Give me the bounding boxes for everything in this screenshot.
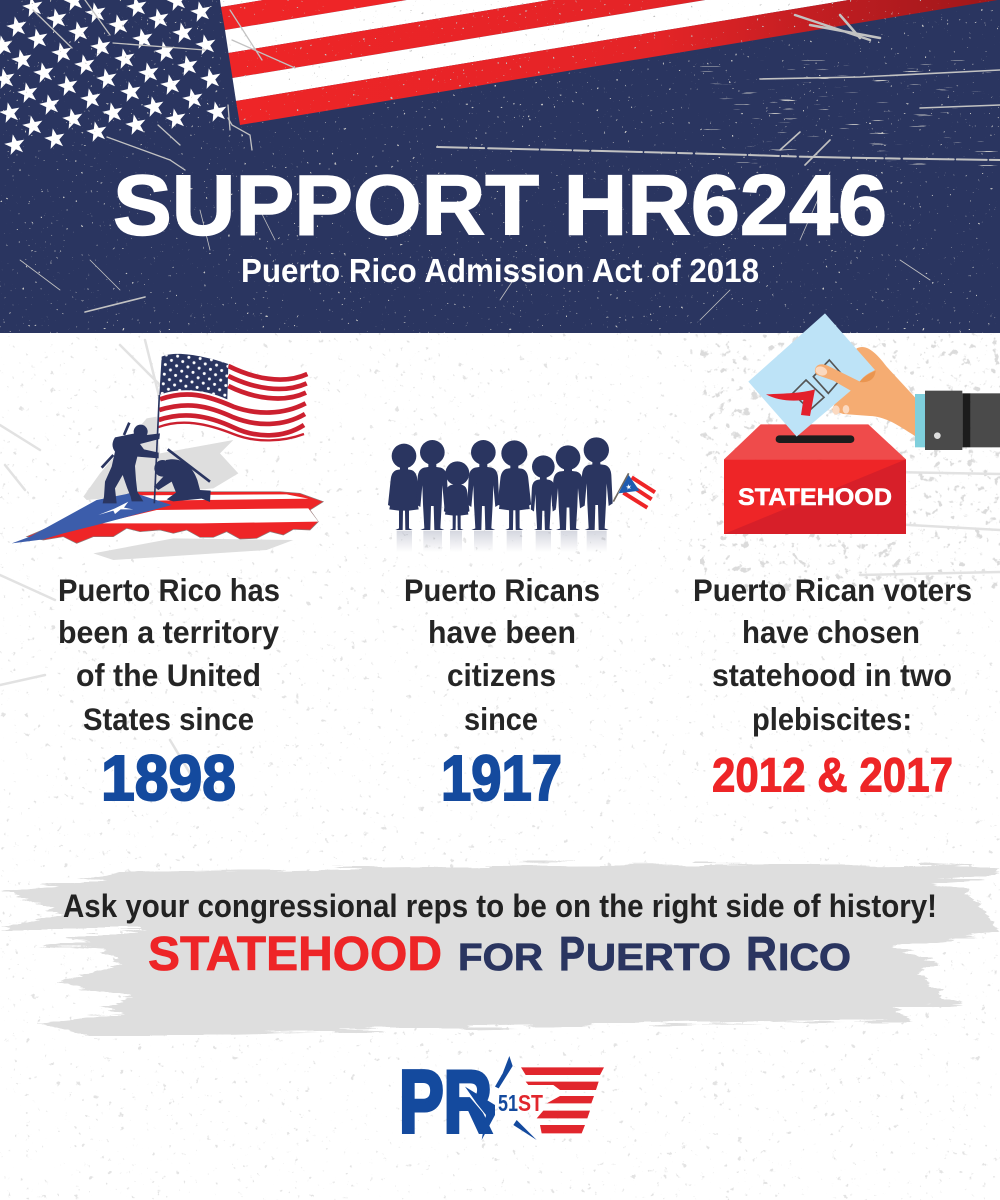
column 2 text: citizens since 1917: have been: [428, 614, 576, 650]
people: [388, 437, 613, 530]
ballot box: [724, 424, 906, 534]
column 3 text: plebiscites: plebiscites:: [752, 701, 912, 737]
illustration: hand casting ballot into statehood box: [724, 313, 1000, 534]
header banner: [0, 0, 1000, 333]
column 3 text: plebiscites: statehood in two: [712, 657, 952, 693]
title: SUPPORT HR6246: [113, 158, 887, 254]
column 1 text: territory since 1898: been a territory: [58, 614, 279, 650]
ballot paper: [748, 313, 875, 437]
hand palm: [832, 347, 915, 436]
illustration: soldiers raising flag on Puerto Rico map: [12, 354, 323, 560]
stars: [0, 0, 229, 156]
PR51st logo: [399, 1052, 604, 1151]
rifle behind kneeling soldier: [168, 449, 210, 482]
call to action headline: [148, 928, 851, 981]
US flag: [157, 354, 307, 440]
standing soldier: [102, 423, 160, 503]
year 1898: 1898: [101, 742, 236, 814]
column 1 text: territory since 1898: States since: [83, 701, 254, 737]
column 3 text: plebiscites: [693, 572, 972, 737]
column 2 text: citizens since 1917: citizens: [447, 657, 556, 693]
map flag: [12, 492, 323, 543]
flag stripes: [220, 0, 1000, 125]
call to action headline: STATEHOOD: [148, 928, 442, 981]
call to action headline: UERTO: [586, 937, 731, 979]
column 2 text: citizens since 1917: [404, 572, 600, 737]
illustration: family holding hands with Puerto Rican flag: [388, 437, 656, 552]
column 1 text: territory since 1898: [58, 572, 280, 737]
call to action headline: ICO: [778, 937, 851, 979]
column 3 text: plebiscites: have chosen: [742, 614, 920, 650]
brush shadow: [83, 417, 293, 560]
column 1 text: territory since 1898: of the United: [76, 657, 261, 693]
flag pole: [154, 395, 159, 503]
column 1 text: territory since 1898: Puerto Rico has: [58, 572, 280, 608]
years 2012 and 2017: 2012 & 2017: [712, 750, 953, 802]
PR51st logo: PR: [399, 1052, 492, 1151]
kneeling soldier: [154, 459, 211, 502]
call to action line: Ask your congressional reps to be on the right side of history!: [63, 888, 937, 924]
column 2 text: citizens since 1917: Puerto Ricans: [404, 572, 600, 608]
call to action headline: FOR: [458, 937, 543, 979]
year 1917: 1917: [441, 742, 562, 814]
grit and scratches: [0, 0, 1000, 333]
jacket sleeve: [915, 391, 1000, 450]
column 3 text: plebiscites: Puerto Rican voters: [693, 572, 972, 608]
small flag: [613, 473, 656, 508]
thumb: [814, 364, 890, 400]
PR51st logo: 51: [498, 1090, 518, 1116]
call to action headline: P: [559, 928, 585, 981]
column 2 text: citizens since 1917: since: [464, 701, 538, 737]
reflections: [397, 531, 607, 552]
subtitle: Puerto Rico Admission Act of 2018: [241, 252, 759, 289]
grey brush stroke behind call to action: [0, 864, 1000, 1035]
PR51st logo: ST: [518, 1090, 543, 1116]
ballot box label: STATEHOOD: [738, 484, 892, 511]
call to action headline: R: [746, 928, 777, 981]
